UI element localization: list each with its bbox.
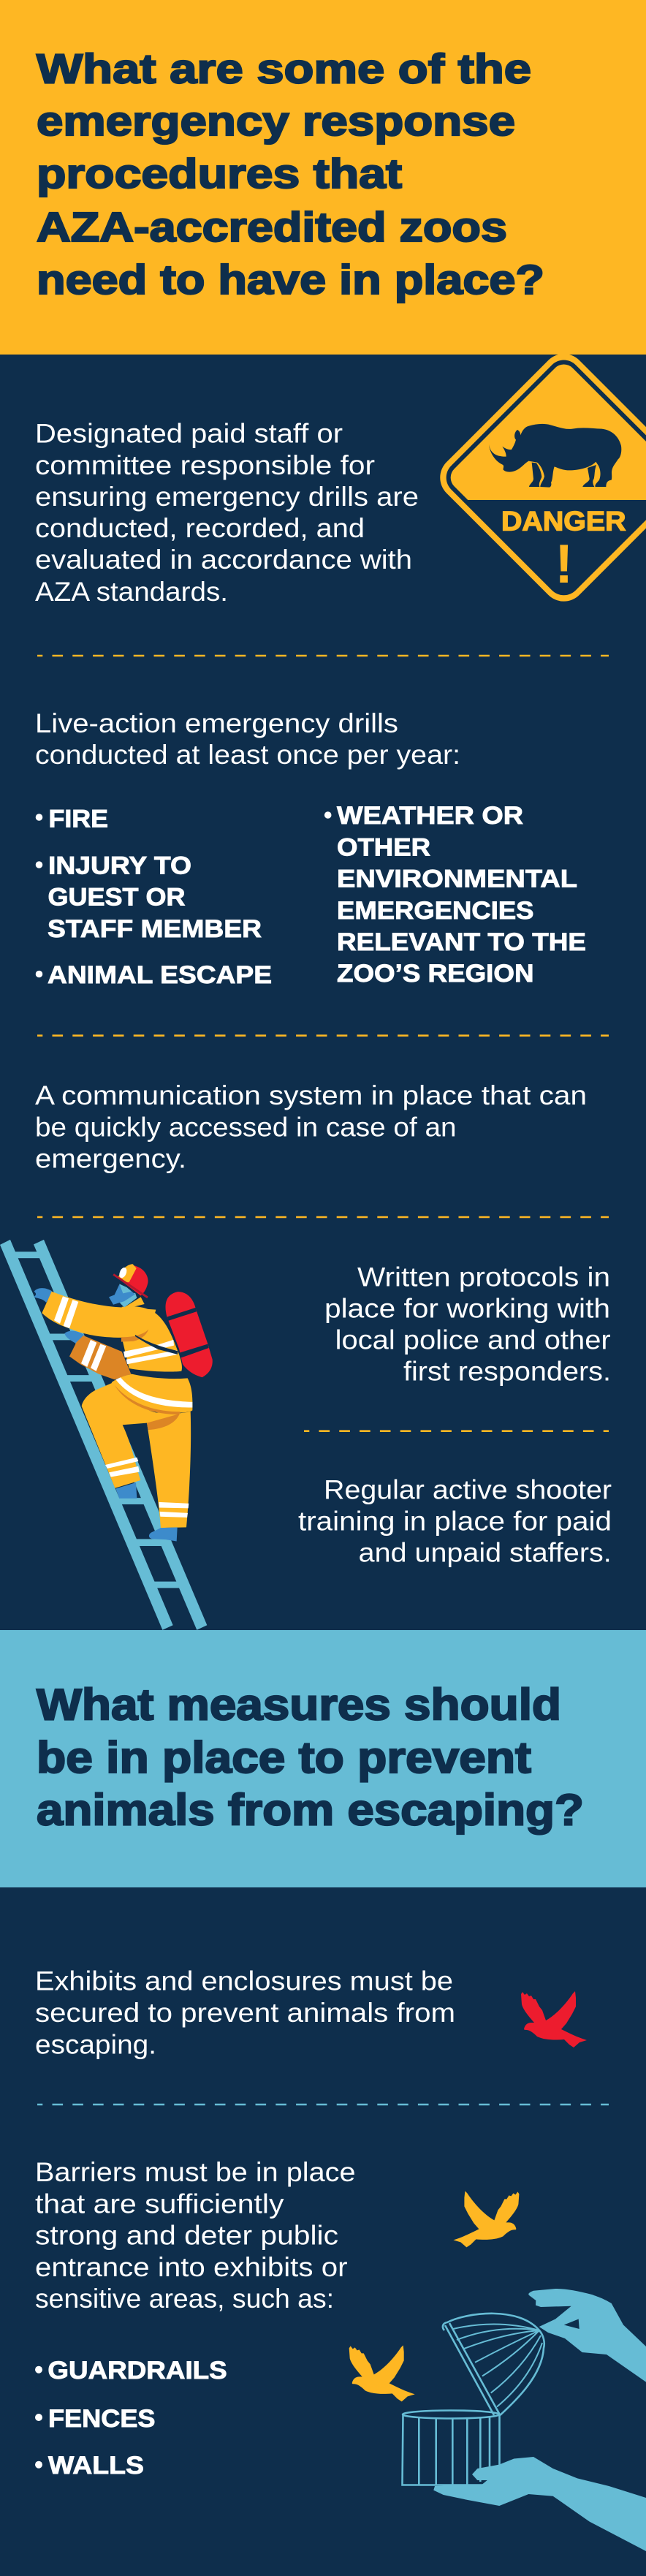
heading: preventing escapes [37, 1681, 584, 1835]
text: designated staff: AZA standards. [35, 577, 228, 607]
panel: second heading banner [0, 1630, 646, 1887]
list: barrier types: WALLS [48, 2452, 144, 2480]
text: barriers: Barriers must be in place [35, 2157, 355, 2187]
text: designated staff: Designated paid staff or [35, 418, 343, 449]
list: barrier types: GUARDRAILS [48, 2357, 227, 2384]
icon: cage dome lid [443, 2314, 544, 2415]
text: barriers: entrance into exhibits or [35, 2252, 348, 2282]
list: drills right column: WEATHER OR [337, 802, 523, 830]
text: barriers: that are sufficiently [35, 2189, 284, 2219]
list: drills left column [36, 806, 272, 989]
text: exhibits secured [35, 1966, 455, 2059]
text: designated staff: ensuring emergency drills are [35, 482, 419, 512]
text: communication system: emergency. [35, 1144, 186, 1174]
icon: cage base [402, 2411, 500, 2485]
list: drills left column: FIRE [48, 806, 108, 833]
text: live-action drills intro: conducted at least once per year: [35, 740, 460, 770]
text: live-action drills intro: Live-action emergency drills [35, 708, 398, 738]
text: communication system: be quickly accessed in case of an [35, 1112, 456, 1142]
text: written protocols: first responders. [403, 1356, 611, 1386]
list: drills right column: RELEVANT TO THE [337, 928, 586, 956]
text: barriers: strong and deter public [35, 2221, 338, 2251]
icon: yellow bird lower [349, 2345, 415, 2401]
text: barriers: sensitive areas, such as: [35, 2284, 334, 2314]
icon: rhino silhouette [489, 424, 621, 488]
icon: yellow bird upper [453, 2191, 519, 2247]
text: active shooter training: and unpaid staffers. [359, 1538, 612, 1568]
text: exhibits secured: Exhibits and enclosures must be [35, 1966, 453, 1996]
heading: preventing escapes: animals from escaping? [37, 1786, 584, 1835]
illustration: firefighter climbing ladder [0, 1240, 213, 1630]
title: emergency response procedures: procedures that [37, 151, 402, 197]
title: emergency response procedures: AZA-accredited zoos [37, 204, 507, 250]
icon: rhino danger sign: ! [555, 533, 573, 594]
text: communication system: A communication system in place that can [35, 1080, 587, 1110]
list: drills left column: GUEST OR [48, 883, 186, 911]
text: designated staff: committee responsible for [35, 450, 375, 480]
panel: header banner [0, 0, 646, 355]
text: communication system [35, 1080, 587, 1174]
list: drills left column: ANIMAL ESCAPE [48, 961, 272, 989]
icon: lower hand [433, 2457, 646, 2551]
text: active shooter training: Regular active shooter [324, 1475, 612, 1505]
icon: rhino danger sign: DANGER [501, 507, 626, 537]
icon: ladder [0, 1240, 207, 1630]
text: barriers [35, 2157, 355, 2314]
icon: open cage held by hands [402, 2289, 646, 2551]
list: barrier types [35, 2357, 227, 2480]
heading: preventing escapes: What measures should [37, 1681, 561, 1730]
text: designated staff: conducted, recorded, and [35, 513, 365, 543]
title: emergency response procedures: need to have in place? [37, 257, 544, 303]
text: designated staff [35, 418, 419, 607]
text: designated staff: evaluated in accordance with [35, 545, 412, 575]
icon: firefighter [34, 1264, 192, 1541]
heading: preventing escapes: be in place to prevent [37, 1733, 531, 1782]
text: written protocols: Written protocols in [357, 1262, 610, 1292]
text: live-action drills intro [35, 708, 460, 770]
title: emergency response procedures: emergency response [37, 98, 515, 144]
text: active shooter training: training in place for paid [298, 1507, 612, 1537]
text: exhibits secured: secured to prevent animals from [35, 1998, 455, 2028]
list: drills right column [324, 802, 586, 988]
list: drills left column: STAFF MEMBER [48, 915, 262, 943]
list: drills left column: INJURY TO [48, 852, 191, 880]
icon: upper hand [528, 2289, 646, 2382]
list: barrier types: FENCES [48, 2405, 155, 2433]
text: written protocols [324, 1262, 611, 1386]
list: drills right column: EMERGENCIES [337, 897, 533, 925]
icon: red bird [521, 1991, 587, 2047]
icon: air tank [165, 1292, 213, 1377]
text: written protocols: local police and other [335, 1325, 611, 1355]
list: drills right column: ZOO’S REGION [337, 960, 533, 988]
icon: rhino danger sign [440, 355, 646, 602]
text: exhibits secured: escaping. [35, 2029, 156, 2059]
title: emergency response procedures: What are some of the [37, 45, 531, 92]
list: drills right column: OTHER [337, 833, 430, 861]
text: written protocols: place for working with [324, 1293, 610, 1323]
text: active shooter training [298, 1475, 612, 1568]
title: emergency response procedures [37, 45, 544, 303]
list: drills right column: ENVIRONMENTAL [337, 865, 577, 893]
